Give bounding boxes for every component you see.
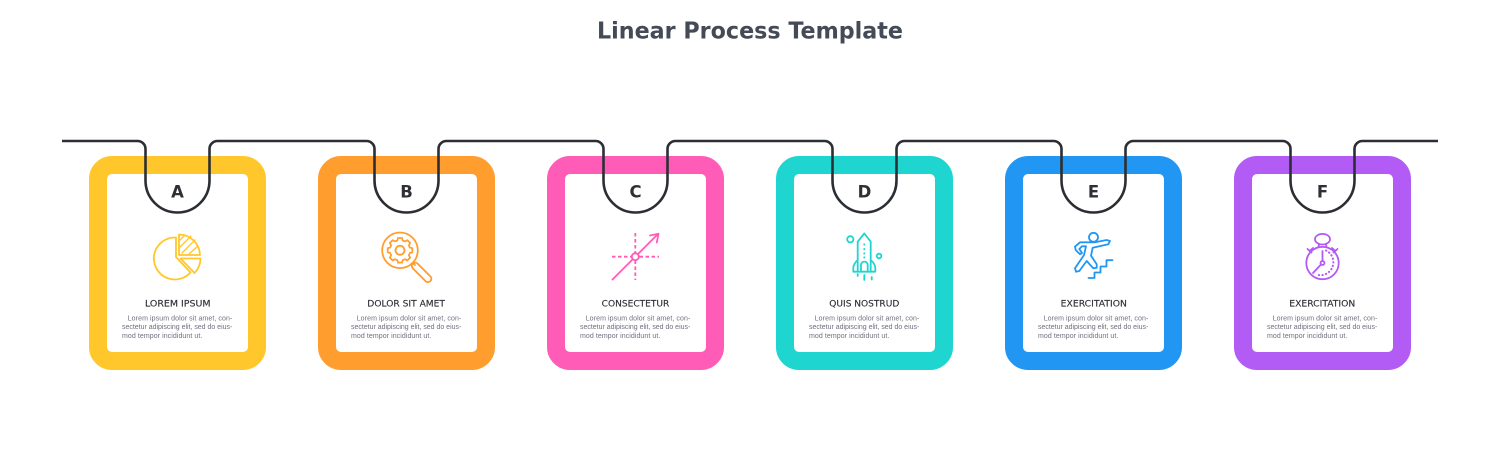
body text E: sectetur adipiscing elit, sed do eius- [1038,324,1149,331]
body text B: Lorem ipsum dolor sit amet, con- [357,316,462,322]
heading D: QUIS NOSTRUD [829,300,900,310]
panel: A [98,165,257,361]
body text C: mod tempor incididunt ut. [580,333,660,340]
body text F [1267,316,1378,340]
panel: B [327,165,486,361]
body text C [580,316,691,340]
connecting process line [62,141,1438,212]
card frame C [556,165,715,361]
body text E: mod tempor incididunt ut. [1038,333,1118,340]
body text E [1038,316,1149,340]
card frame F [1243,165,1402,361]
body text D: sectetur adipiscing elit, sed do eius- [809,324,920,331]
body text A: Lorem ipsum dolor sit amet, con- [128,316,233,322]
card frame E [1014,165,1173,361]
panel: E [1014,165,1173,361]
step letters: C [629,182,642,201]
body text A: mod tempor incididunt ut. [122,333,202,340]
step letters: F [1317,182,1328,201]
heading B: DOLOR SIT AMET [367,300,446,310]
body text C: Lorem ipsum dolor sit amet, con- [586,316,691,322]
icon: pie chart [154,234,200,279]
icon: stopwatch [1306,234,1339,279]
body text D: mod tempor incididunt ut. [809,333,889,340]
icon: person climbing stairs [1075,233,1112,278]
step letters: B [400,182,413,201]
icon: magnifier with gear [382,232,431,282]
panel: D [785,165,944,361]
card frame B [327,165,486,361]
body text C: sectetur adipiscing elit, sed do eius- [580,324,691,331]
body text B [351,316,462,340]
body text F: sectetur adipiscing elit, sed do eius- [1267,324,1378,331]
step letters: A [171,182,184,201]
body text F: mod tempor incididunt ut. [1267,333,1347,340]
step letters: E [1088,182,1099,201]
body text A: sectetur adipiscing elit, sed do eius- [122,324,233,331]
body text D: Lorem ipsum dolor sit amet, con- [815,316,920,322]
body text B: sectetur adipiscing elit, sed do eius- [351,324,462,331]
body text D [809,316,920,340]
card frame A [98,165,257,361]
step letters: D [858,182,871,201]
title: Linear Process Template [597,18,903,44]
icon: growth arrow on axes [612,233,659,280]
heading F: EXERCITATION [1289,300,1355,310]
step letters [171,182,1328,201]
icon: rocket [847,234,881,280]
body text F: Lorem ipsum dolor sit amet, con- [1273,316,1378,322]
body text B: mod tempor incididunt ut. [351,333,431,340]
panel: C [556,165,715,361]
body text E: Lorem ipsum dolor sit amet, con- [1044,316,1149,322]
heading A: LOREM IPSUM [145,300,210,310]
body text A [122,316,233,340]
card frame D [785,165,944,361]
heading C: CONSECTETUR [602,300,669,310]
heading E: EXERCITATION [1061,300,1127,310]
panel: F [1243,165,1402,361]
